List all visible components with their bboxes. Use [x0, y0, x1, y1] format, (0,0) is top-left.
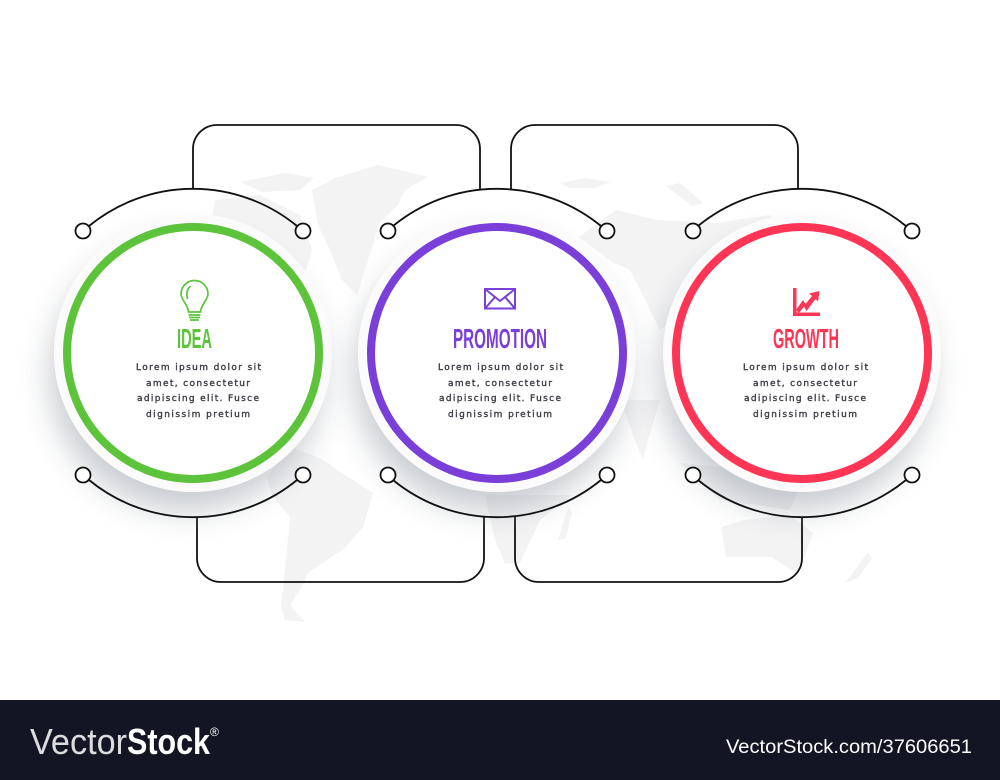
red ring — [676, 227, 928, 479]
heading: promotion: PROMOTION — [453, 323, 547, 354]
text: growth description: Lorem ipsum dolor sit — [743, 363, 868, 373]
text: promotion description: dignissim pretium — [448, 410, 552, 420]
disc shadow — [50, 237, 324, 511]
text: growth description: adipiscing elit. Fusce — [744, 394, 866, 404]
image id: VectorStock.com/37606651 — [726, 737, 972, 758]
text: promotion description: adipiscing elit. Fusce — [439, 394, 561, 404]
world map — [200, 165, 872, 622]
top arc with nodes — [380, 189, 614, 238]
text: promotion description: Lorem ipsum dolor sit — [438, 363, 563, 373]
footer bar — [0, 700, 1000, 780]
text: idea description — [136, 363, 261, 420]
icon: envelope — [485, 289, 515, 308]
white disc — [358, 214, 636, 492]
panel: promotion — [354, 189, 636, 517]
text: idea description: adipiscing elit. Fusce — [137, 394, 259, 404]
white disc — [54, 214, 332, 492]
connector: top idea to promotion — [193, 125, 480, 189]
bottom arc with nodes — [686, 468, 920, 517]
text: idea description: dignissim pretium — [146, 410, 250, 420]
panel: idea — [50, 189, 332, 517]
text: idea description: Lorem ipsum dolor sit — [136, 363, 261, 373]
top arc with nodes — [686, 189, 920, 238]
icon: growth chart — [793, 288, 820, 316]
connector: bottom promotion to growth — [515, 517, 802, 582]
logo: registered mark: ® — [210, 725, 219, 739]
bottom arc with nodes — [76, 468, 310, 517]
text: growth description — [743, 363, 868, 420]
icon: light bulb — [181, 280, 208, 320]
bottom arc with nodes — [380, 468, 614, 517]
text: growth description: dignissim pretium — [753, 410, 857, 420]
purple ring — [371, 227, 623, 479]
heading: idea: IDEA — [177, 323, 212, 354]
connector: top promotion to growth — [511, 125, 798, 189]
logo: Stock: Stock — [127, 721, 211, 762]
logo: Vector: Vector — [30, 721, 127, 762]
text: growth description: amet, consectetur — [753, 379, 857, 389]
disc shadow — [354, 237, 628, 511]
white disc — [663, 214, 941, 492]
green ring — [67, 227, 319, 479]
text: promotion description — [438, 363, 563, 420]
heading: growth: GROWTH — [773, 323, 839, 354]
panel: growth — [659, 189, 941, 517]
connector: bottom idea to promotion — [197, 517, 484, 582]
text: idea description: amet, consectetur — [146, 379, 250, 389]
top arc with nodes — [76, 189, 310, 238]
text: promotion description: amet, consectetur — [448, 379, 552, 389]
disc shadow — [659, 237, 933, 511]
